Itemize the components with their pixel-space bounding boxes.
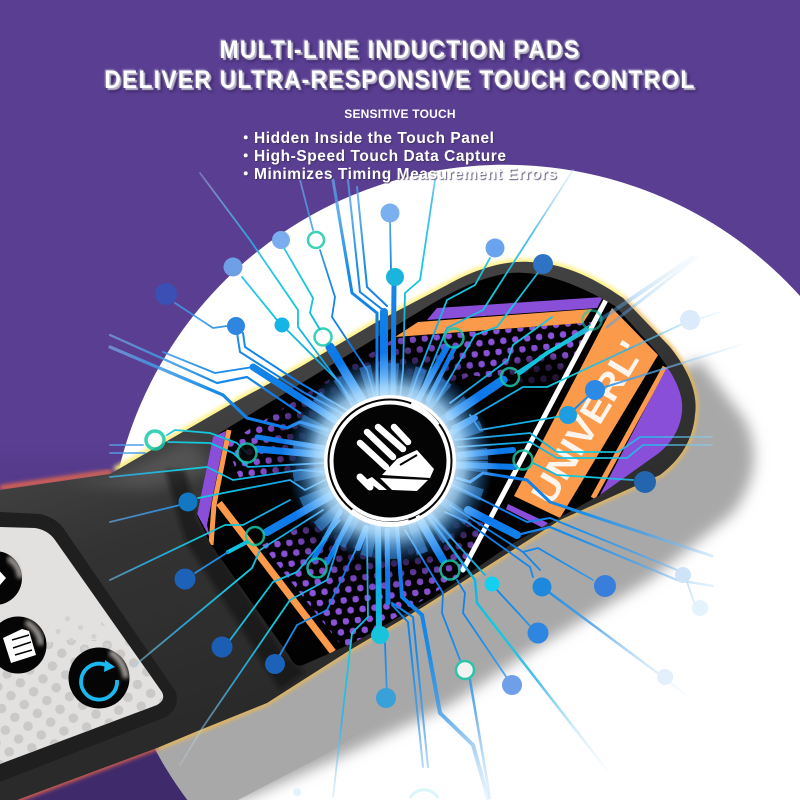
button: reload <box>68 648 130 708</box>
hub badge with hand icon <box>324 395 456 527</box>
wires: left <box>110 430 325 522</box>
orange banner <box>514 308 658 518</box>
icon: hand <box>360 427 434 491</box>
small purple stripe <box>506 504 548 528</box>
wires: top left <box>110 173 376 430</box>
bullet list: ・Minimizes Timing Measurement Errors <box>238 166 557 183</box>
left purple and orange accents <box>196 431 226 538</box>
panel halftone dots <box>0 640 170 770</box>
paddle cast shadow <box>140 360 754 800</box>
strap highlight <box>60 440 215 490</box>
white circle <box>108 165 800 800</box>
wires: bottom left <box>110 496 352 765</box>
nodes: filled cyan <box>274 268 500 644</box>
pad inlay <box>196 273 690 666</box>
white divider line <box>463 300 606 570</box>
title: DELIVER ULTRA-RESPONSIVE TOUCH CONTROL <box>104 66 696 94</box>
title: MULTI-LINE INDUCTION PADS <box>220 36 580 64</box>
nodes: filled blue <box>155 204 708 796</box>
hub glow <box>286 357 494 565</box>
wires: bottom <box>277 525 488 798</box>
bullet list: ・High-Speed Touch Data Capture <box>238 148 507 165</box>
lower dot field <box>262 516 488 646</box>
title <box>104 36 698 94</box>
banner lettering: UNIVERL' <box>523 334 652 511</box>
bullet list <box>238 130 558 184</box>
subtitle: SENSITIVE TOUCH <box>344 107 456 121</box>
purple tip <box>600 367 690 495</box>
control panel on strap <box>0 512 177 782</box>
circuit wires <box>110 170 740 798</box>
edge glow <box>0 262 696 800</box>
wires: right <box>445 433 713 702</box>
artwork: paddle, circle and circuit wires <box>0 164 800 800</box>
button: arrow <box>0 551 22 605</box>
nodes: open rings <box>146 232 602 798</box>
button: save <box>0 616 46 674</box>
paddle body <box>0 262 696 800</box>
bullet list: ・Hidden Inside the Touch Panel <box>238 130 494 147</box>
purple and orange top stripes <box>427 297 603 320</box>
wires: top <box>333 170 590 416</box>
recess shadow beside pad <box>165 470 305 690</box>
upper dot field <box>226 322 592 480</box>
wires: top right <box>452 257 740 432</box>
hub shadow on pad <box>282 353 498 569</box>
orange side stripe <box>593 367 665 498</box>
wires: bottom right <box>405 512 617 798</box>
